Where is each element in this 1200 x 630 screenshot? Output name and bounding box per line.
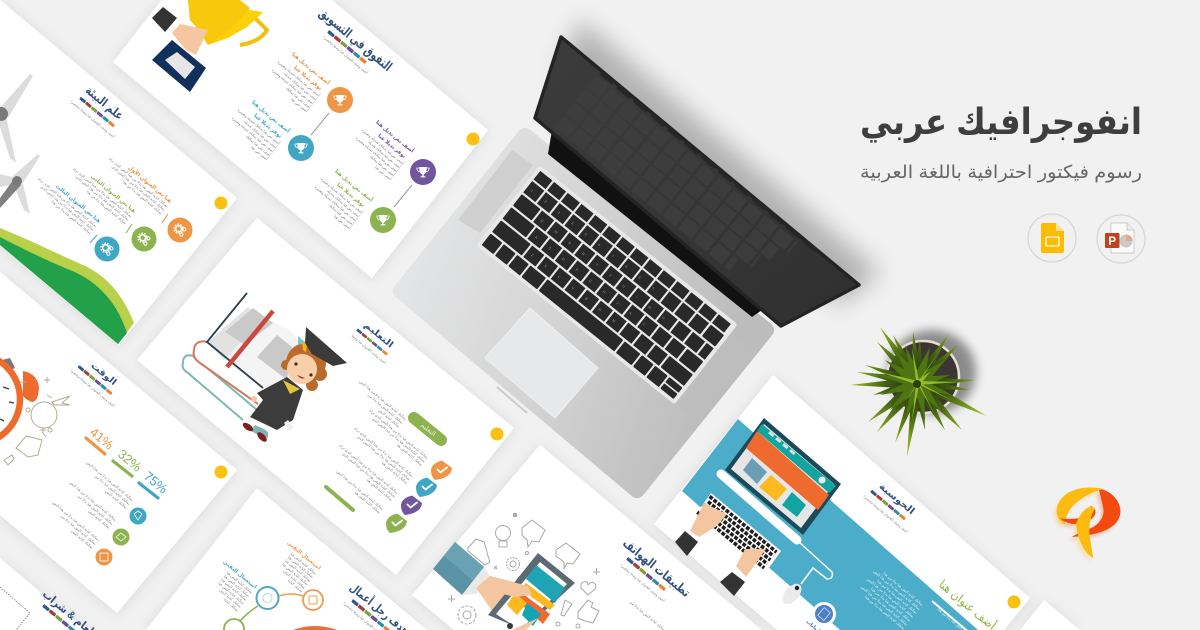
keyboard: ASDFGHJKL <box>534 235 658 336</box>
text block: teal <box>225 94 292 161</box>
keyboard: 1234567890 <box>530 189 667 300</box>
subtitle: أضف وصف للعنوان هنا وصفا مختصرا <box>863 494 909 534</box>
trackpad <box>485 308 598 418</box>
text block: orange: توفر بديلا عنا <box>292 65 323 92</box>
text block: green <box>308 163 375 230</box>
text block: first <box>103 150 174 215</box>
icon: data circle <box>812 602 836 626</box>
text block: orange: يمكنك كتابة النص هنا <box>287 555 314 579</box>
text columns on band: يمكنك كتابة النص هنا بدلا من هذا <box>870 587 912 623</box>
laptop <box>401 20 880 490</box>
subtitle: رسوم فيكتور احترافية باللغة العربية <box>860 162 1142 183</box>
color bar <box>356 328 388 356</box>
diagram: ring chain <box>224 587 323 630</box>
text block: third <box>32 172 102 235</box>
text block: first: يمكنك كتابة النص هنا بدلا من هذا <box>121 180 163 215</box>
subtitle: أضف وصف للعنوان هنا وصفا مختصرا <box>70 368 116 408</box>
doodles <box>448 513 600 628</box>
text block: three: يمكنك كتابة النص <box>70 529 94 550</box>
text block: item three: يمكنك كتابة النص هنا بدلا من هذا النص الذي تراه <box>339 443 399 495</box>
icon: trophy in hand <box>152 0 267 92</box>
text columns on band: يمكنك كتابة النص هنا بدلا من هذا النص <box>860 585 908 626</box>
text block: two: يمكنك كتابة النص هنا بدلا من هذا النص <box>68 480 117 522</box>
page dot <box>214 466 228 478</box>
stat: 32%: 32% <box>115 446 145 475</box>
text block: teal: يمكنك كتابة النص <box>219 588 242 609</box>
speaker right <box>678 335 757 420</box>
text block: purple: أضف نص هنا يمكنك تعديله وتغييره <box>355 135 399 173</box>
panel: slide computing <box>654 375 1030 630</box>
icon: phone in hand <box>462 553 575 630</box>
logo shadow <box>1054 491 1118 562</box>
text block: two: يمكنك كتابة النص <box>87 509 111 530</box>
icon: purple check <box>401 496 422 515</box>
text block: orange: يمكنك كتابة النص <box>283 569 306 590</box>
color bar <box>626 557 666 591</box>
text block: teal: يمكنك كتابة النص هنا <box>223 574 250 598</box>
text block: teal: أضف نص هنا <box>250 144 269 161</box>
title: تطبيقات الهواتف <box>620 536 693 600</box>
green pill <box>414 418 441 440</box>
text block: teal: أضف نص بديل هنا <box>250 98 292 135</box>
stat: 41%: 41% <box>87 424 117 453</box>
text block: second: يمكنك كتابة النص هنا بدلا من هذا <box>85 190 127 225</box>
title: انفوجرافيك عربي <box>860 101 1142 143</box>
screen keyboard reflection <box>559 72 819 303</box>
text block: teal <box>205 559 258 612</box>
text block: teal: يمكنك كتابة النص هنا <box>220 578 248 602</box>
text block: one: يمكنك كتابة النص <box>104 489 128 510</box>
leaves inner <box>878 345 952 420</box>
text block: teal: استعمال التقني <box>222 559 258 591</box>
text block: green: أضف نص هنا يمكنك تعديله وتغييره <box>314 184 358 222</box>
text block: orange: أضف نص هنا يمكنك <box>285 86 312 109</box>
text columns on band: يمكنك كتابة النص هنا بدلا من هذا <box>876 579 918 615</box>
icon: brand logo <box>1054 488 1120 562</box>
logo ribbon <box>1057 488 1120 558</box>
text block: purple: توفر بديلا عنا <box>376 133 407 160</box>
text block: green: أضف نص هنا يمكنك تعديله <box>326 188 361 219</box>
text block: green: توفر بديلا عنا <box>335 182 366 209</box>
text block: item three: يمكنك كتابة النص هنا <box>366 478 393 502</box>
text block: purple <box>349 114 416 181</box>
text columns on band: يمكنك كتابة النص هنا بدلا من هذا النص <box>872 569 921 611</box>
text block: orange: أضف نص هنا يمكنك تعديله <box>283 71 318 102</box>
icon: google slides badge <box>1028 214 1076 262</box>
text block: teal: يمكنك كتابة <box>223 598 239 612</box>
text block: orange: استعمال التقني <box>286 540 322 572</box>
text block: first: يمكنك كتابة النص هنا بدلا من هذا النص الذي تراه <box>108 157 168 208</box>
doodles <box>4 377 70 465</box>
text block: purple: أضف نص هنا يمكنك تعديله وتغييره <box>361 127 405 166</box>
text block: one: يمكنك كتابة النص هنا بدلا من هذا النص <box>85 460 134 502</box>
text columns on band <box>857 565 978 630</box>
text block: first: يمكنك كتابة النص هنا بدلا من هذا النص الذي <box>111 165 166 212</box>
icon: teal gear circle <box>94 236 120 262</box>
text block: third: يمكنك كتابة النص هنا بدلا من هذا النص الذي تراه <box>37 177 97 228</box>
monitor stand strip <box>721 474 797 540</box>
keyboard: ZXCVBNM <box>530 253 628 333</box>
text block: two: يمكنك كتابة النص هنا بدلا من <box>77 494 114 526</box>
text block: item one: يمكنك كتابة النص هنا <box>396 443 423 467</box>
pot shadow <box>888 330 976 414</box>
panel: slide environment <box>0 0 237 345</box>
page dot <box>1008 596 1020 608</box>
slide sheet <box>412 445 762 630</box>
edge notch <box>497 387 527 413</box>
color bar <box>351 599 391 630</box>
slide sheet <box>146 488 427 630</box>
text block: purple: أضف نص هنا يمكنك تعديله <box>367 139 402 170</box>
text block: intro: يمكنك كتابة النص <box>377 408 401 429</box>
text block: item one: يمكنك كتابة النص هنا بدلا من هذا النص الذي <box>371 417 426 463</box>
text columns on band: يمكنك كتابة النص هنا بدلا من هذا <box>882 571 924 607</box>
icon: powerpoint badge: P <box>1108 236 1116 248</box>
text columns on band: يمكنك كتابة النص هنا بدلا من هذا <box>864 595 905 630</box>
speaker left <box>458 150 533 233</box>
connector lines <box>311 113 412 207</box>
green wave <box>0 228 134 344</box>
keyboard: QWERTYUIOP <box>540 219 677 330</box>
panel: slide marketing excellence <box>113 0 488 278</box>
slide sheet <box>0 272 237 613</box>
text block: orange: أضف نص هنا يمكنك تعديله وتغييره <box>277 59 321 98</box>
title: التعليم <box>362 319 395 350</box>
color bar <box>79 97 115 127</box>
text block: third: يمكنك كتابة النص هنا بدلا من هذا النص الذي <box>40 185 95 232</box>
text block: teal: أضف نص هنا يمكنك تعديله وتغييره <box>237 107 281 146</box>
text block: orange: أضف نص هنا يمكنك تعديله وتغييره <box>271 67 315 105</box>
divider ticks <box>90 214 168 243</box>
blue band <box>682 419 978 630</box>
keyboard panel <box>696 493 781 572</box>
icon: green circle <box>112 528 130 546</box>
text block: green: أضف نص هنا يمكنك <box>328 203 355 226</box>
stat: 75%: 75% <box>141 468 171 497</box>
keyboard <box>476 165 738 405</box>
icon: sleeve <box>433 542 484 595</box>
green pill: التعليم <box>419 422 437 438</box>
icon: teal circle <box>130 508 146 524</box>
text block: teal: يمكنك كتابة النص هنا <box>226 571 253 595</box>
text block: teal: أضف نص هنا يمكنك <box>245 134 272 157</box>
text block: item two: يمكنك كتابة النص هنا بدلا من هذا النص الذي تراه <box>354 426 414 478</box>
color bar <box>42 604 82 630</box>
orange half circle <box>293 626 337 630</box>
text block: second: يمكنك كتابة النص هنا بدلا من هذا النص الذي تراه <box>72 167 132 218</box>
text block: item two: يمكنك كتابة النص هنا <box>381 461 408 485</box>
slide sheet <box>0 558 85 630</box>
illustration: potted plant <box>850 327 987 457</box>
color bar <box>870 490 906 520</box>
icon: orange check <box>431 460 452 480</box>
illustration: books <box>183 293 312 420</box>
subtitle: أضف وصف للعنوان هنا وصفا <box>351 333 387 365</box>
panel: slide mobile apps <box>412 445 762 630</box>
panel: slide corner <box>1020 600 1080 630</box>
title: التفوق في التسويق <box>317 5 395 74</box>
text block: orange: يمكنك كتابة النص هنا <box>290 552 317 576</box>
text block: orange: يمكنك كتابة النص هنا <box>281 562 309 586</box>
illustration: alarm clock <box>0 354 39 444</box>
text columns on band: يمكنك كتابة النص هنا بدلا من هذا النص <box>866 577 915 619</box>
laptop screen shadow <box>560 20 880 305</box>
text block: orange <box>265 46 332 113</box>
leaves bright <box>880 348 958 420</box>
page dot <box>214 196 228 210</box>
text block: orange: أضف نص هنا <box>290 96 309 113</box>
text block: first: هنا نص العنوان الأول <box>127 163 174 205</box>
text block: green: أضف نص هنا يمكنك تعديله وتغييره <box>320 176 364 215</box>
illustration: monitor <box>725 418 841 535</box>
text block: orange: أضف نص بديل هنا <box>290 50 332 87</box>
green bar <box>326 487 353 510</box>
text block: orange <box>269 540 322 593</box>
text block: item four: يمكنك كتابة النص هنا بدلا من هذا النص <box>335 469 384 511</box>
panel: slide business goal <box>146 488 427 630</box>
icon: orange gear circle <box>168 218 192 242</box>
text block: one: يمكنك كتابة النص هنا بدلا من <box>94 474 131 506</box>
color bar <box>77 365 113 395</box>
title: علم البيئة <box>83 83 126 123</box>
text block: orange: يمكنك كتابة النص هنا <box>284 559 312 583</box>
panel: slide education <box>137 218 514 575</box>
dotted frame <box>0 587 30 630</box>
illustration: graduate girl <box>241 327 347 443</box>
slide sheet <box>0 0 237 345</box>
color bar <box>327 30 367 64</box>
subtitle: أضف وصف للعنوان هنا وصفا مختصرا <box>70 99 116 139</box>
mouse with cord <box>779 542 832 608</box>
text block: third: يمكنك كتابة النص هنا بدلا من هذا <box>50 200 92 235</box>
page dot <box>466 132 480 146</box>
slide sheet <box>113 0 488 278</box>
icon: purple trophy circle <box>410 159 436 185</box>
text block: intro: يمكنك كتابة النص هنا بدلا من هذا النص <box>358 379 407 421</box>
text block: three: يمكنك كتابة النص هنا بدلا من هذا النص <box>51 500 100 542</box>
panel: slide time <box>0 272 237 613</box>
icon: wind turbines <box>0 74 40 214</box>
slide sheet <box>137 218 514 575</box>
icon: orange trophy circle <box>327 87 353 113</box>
text block: teal: أضف نص هنا يمكنك تعديله وتغييره <box>231 115 275 153</box>
page dot <box>490 428 504 440</box>
icon: orange circle <box>96 548 112 566</box>
leaves long <box>850 327 987 457</box>
text block: green: أضف نص بديل هنا <box>333 167 375 204</box>
icon: green trophy circle <box>370 207 396 233</box>
text block: second: يمكنك كتابة النص هنا بدلا من هذا النص الذي <box>75 175 130 222</box>
white rule <box>932 601 978 630</box>
text block: item two: يمكنك كتابة النص هنا بدلا من هذا النص الذي <box>356 435 411 481</box>
text block: third: هنا نص العنوان الثالث <box>54 184 102 225</box>
subtitle: أضف وصف للعنوان هنا وصفا مختصرا <box>323 35 369 75</box>
subtitle: أضف وصف للعنوان هنا وصفا مختصرا <box>620 563 666 603</box>
text block: three: يمكنك كتابة النص هنا بدلا من <box>60 514 97 546</box>
text block: intro: يمكنك كتابة النص هنا بدلا من <box>367 393 404 425</box>
text block: purple: أضف نص هنا <box>374 164 393 181</box>
text block: second: هنا نص العنوان الثاني <box>89 174 137 215</box>
title: الحوسبة <box>877 481 916 517</box>
slide sheet <box>654 375 1030 630</box>
text block: second <box>67 162 137 225</box>
text block: purple: أضف نص بديل هنا <box>374 118 416 155</box>
icon: green check <box>386 514 407 533</box>
icon: teal trophy circle <box>288 135 314 161</box>
text block: orange: يمكنك كتابة <box>287 579 303 593</box>
laptop screen <box>535 37 859 326</box>
text block: item three: يمكنك كتابة النص هنا بدلا من هذا النص الذي <box>341 452 396 498</box>
text block: purple: أضف نص هنا يمكنك <box>369 154 396 177</box>
icon: green gear circle <box>132 226 156 252</box>
text block: teal: أضف نص هنا يمكنك تعديله <box>243 119 278 150</box>
hinge <box>548 130 762 317</box>
text block: green: أضف نص هنا <box>333 213 352 230</box>
pot <box>887 341 959 413</box>
panel: slide food and drink <box>0 558 100 630</box>
icon: blue check <box>416 478 437 497</box>
text block: item one: يمكنك كتابة النص هنا بدلا من هذا النص الذي تراه <box>369 408 429 460</box>
text block: teal: توفر بديلا عنا <box>252 113 283 140</box>
text block: item four: يمكنك كتابة النص هنا <box>354 490 381 514</box>
illustration: typing hands <box>675 503 766 596</box>
leaves core <box>913 380 921 388</box>
title: الوقت <box>89 360 118 388</box>
icon: powerpoint badge <box>1097 215 1145 263</box>
text block: teal: يمكنك كتابة النص هنا <box>217 581 245 605</box>
laptop base <box>401 136 766 490</box>
